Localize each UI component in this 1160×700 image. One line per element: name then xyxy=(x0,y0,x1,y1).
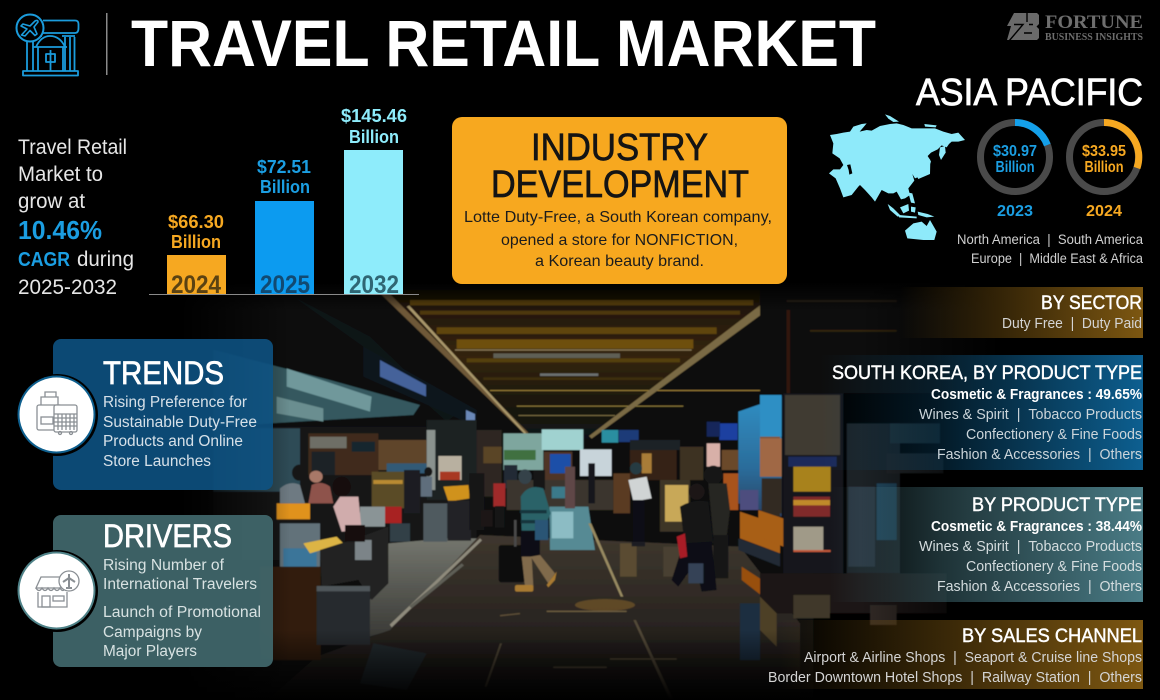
text block: other regions: North America | South America xyxy=(957,232,1143,247)
panel: industry development xyxy=(452,117,787,284)
donut: 2024 xyxy=(1070,122,1139,220)
trends heading: TRENDS xyxy=(103,355,224,391)
donut: 2023 xyxy=(980,122,1050,220)
person: walker with suitcase xyxy=(499,469,557,592)
person: man in white shirt xyxy=(628,462,652,546)
text block: CAGR summary: Market to xyxy=(18,163,103,186)
text block: CAGR summary xyxy=(18,136,134,299)
text block: CAGR summary: CAGR xyxy=(18,249,70,271)
panel: south korea by product type: Wines & Spirit | Tobacco Products xyxy=(919,406,1142,423)
drivers text: Rising Number of xyxy=(103,557,225,574)
text block: CAGR summary: Travel Retail xyxy=(18,136,127,159)
panel: by product type: Wines & Spirit | Tobacco Products xyxy=(919,538,1142,555)
drivers text: Campaigns by xyxy=(103,624,202,641)
panel: by product type: Fashion & Accessories | Others xyxy=(937,578,1142,595)
panel: by sales channel: BY SALES CHANNEL xyxy=(962,626,1142,647)
panel body: Lotte Duty-Free, a South Korean company, xyxy=(464,209,772,226)
bar 2032: Billion xyxy=(349,127,399,147)
bar 2024: 2024 xyxy=(171,271,221,299)
panel: trends xyxy=(53,339,273,490)
bar 2025: 2025 xyxy=(260,271,310,299)
drivers text xyxy=(103,557,261,660)
drivers text: International Travelers xyxy=(103,576,257,593)
logo subtitle: BUSINESS INSIGHTS xyxy=(1045,32,1143,43)
people: group at right xyxy=(672,466,730,592)
people: distant shoppers xyxy=(469,463,595,530)
donut: 2024: 2024 xyxy=(1086,203,1122,220)
logo: fortune business insights xyxy=(1007,12,1143,43)
panel: by sector: Duty Free | Duty Paid xyxy=(1002,315,1142,332)
donut: 2024: Billion xyxy=(1084,159,1124,176)
logo wordmark: FORTUNE xyxy=(1045,12,1143,33)
bar chart: market size xyxy=(149,106,419,299)
panel: by sales channel: Airport & Airline Shops | Seaport & Cruise line Shops xyxy=(804,649,1142,666)
panel: south korea by product type: Fashion & Accessories | Others xyxy=(937,446,1142,463)
panel: by product type xyxy=(830,487,1143,602)
bar 2032 xyxy=(341,106,407,299)
drivers text: Launch of Promotional xyxy=(103,604,261,621)
bar 2025: $72.51 xyxy=(257,157,311,177)
bar 2024 xyxy=(167,212,226,299)
panel: drivers xyxy=(53,515,273,667)
panel heading xyxy=(491,127,749,206)
donut: 2024: $33.95 xyxy=(1082,143,1126,160)
donut: 2023: Billion xyxy=(996,159,1034,176)
panel body xyxy=(464,209,772,270)
axis baseline xyxy=(149,294,419,295)
panel: south korea by product type: Cosmetic & Fragrances : 49.65% xyxy=(931,387,1142,403)
bar 2025 xyxy=(255,157,314,299)
panel: by product type: Cosmetic & Fragrances : 38.44% xyxy=(931,519,1142,535)
icon: duty-free shop with plane xyxy=(16,14,78,76)
donut: 2023: $30.97 xyxy=(993,143,1037,160)
logo mark xyxy=(1007,13,1039,41)
panel heading: INDUSTRY xyxy=(531,127,708,169)
panel: south korea by product type xyxy=(820,355,1143,470)
panel: south korea by product type: SOUTH KOREA, BY PRODUCT TYPE xyxy=(832,363,1142,384)
panel: by product type: Confectionery & Fine Foods xyxy=(966,558,1142,575)
people: shoppers at left counter xyxy=(280,465,432,542)
trends text: Rising Preference for xyxy=(103,394,247,411)
bar 2032: $145.46 xyxy=(341,106,407,126)
text block: CAGR summary: grow at xyxy=(18,190,85,213)
panel: by sector xyxy=(900,287,1143,338)
map: asia pacific xyxy=(829,114,965,240)
trends text: Products and Online xyxy=(103,433,243,450)
panel body: a Korean beauty brand. xyxy=(535,253,704,270)
panel heading: DEVELOPMENT xyxy=(491,164,749,206)
title divider xyxy=(106,13,108,75)
text block: CAGR summary: 2025-2032 xyxy=(18,276,117,299)
text block: CAGR summary: during xyxy=(77,248,134,271)
panel: by product type: BY PRODUCT TYPE xyxy=(972,495,1142,516)
bar 2024: Billion xyxy=(171,232,221,252)
panel: by sales channel xyxy=(768,620,1143,689)
icon: shop with plane xyxy=(16,550,98,632)
heading: asia pacific: ASIA PACIFIC xyxy=(916,72,1143,114)
trends text: Sustainable Duty-Free xyxy=(103,414,257,431)
drivers heading: DRIVERS xyxy=(103,518,232,554)
panel: south korea by product type: Confectionery & Fine Foods xyxy=(966,426,1142,443)
photo: airport retail concourse xyxy=(180,280,1060,700)
panel: by sales channel: Border Downtown Hotel Shops | Railway Station | Others xyxy=(768,669,1142,686)
bar 2025: Billion xyxy=(260,177,310,197)
donut: 2023: 2023 xyxy=(997,203,1033,220)
title: TRAVEL RETAIL MARKET xyxy=(131,6,876,80)
text block: other regions xyxy=(957,232,1143,266)
panel: by sector: BY SECTOR xyxy=(1041,293,1142,314)
trends text xyxy=(103,394,257,470)
icon: shopping cart with bags xyxy=(16,374,98,456)
drivers text: Major Players xyxy=(103,643,197,660)
text block: other regions: Europe | Middle East & Africa xyxy=(971,251,1143,266)
text block: CAGR summary: 10.46% xyxy=(18,215,102,245)
bar 2024: $66.30 xyxy=(168,212,224,232)
panel body: opened a store for NONFICTION, xyxy=(501,232,738,249)
trends text: Store Launches xyxy=(103,453,211,470)
bar 2032: 2032 xyxy=(349,271,399,299)
